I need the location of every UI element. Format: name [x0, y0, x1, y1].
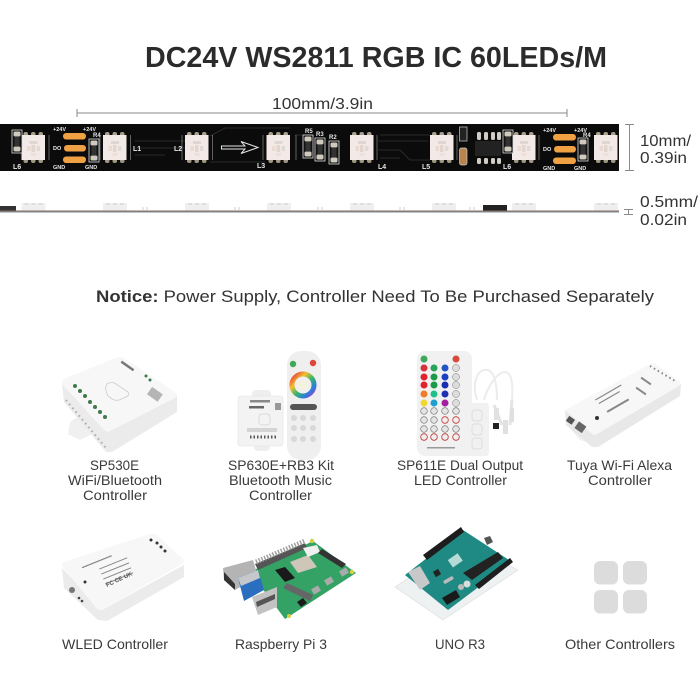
product: Raspberry Pi board [223, 539, 356, 619]
LED outlines [49, 135, 539, 160]
strip silkscreen labels: +24V [543, 128, 556, 134]
label: Tuya: Controller [588, 472, 652, 488]
strip silkscreen labels: +24V [83, 127, 96, 133]
label: Tuya: Tuya Wi-Fi Alexa [567, 457, 672, 473]
strip silkscreen labels: R2 [329, 135, 337, 141]
IC chip [475, 132, 501, 164]
product: UNO R3 board [395, 527, 518, 620]
LEDs [22, 132, 618, 163]
strip silkscreen labels: R5 [305, 129, 313, 135]
remote [287, 351, 321, 460]
strip silkscreen labels: GND [543, 166, 555, 172]
notice: Notice: Power Supply, Controller Need To Be Purchased Separately [96, 287, 655, 306]
label: SP530E: Controller [83, 487, 147, 503]
controller box [238, 390, 283, 451]
width dimension: 10mm: 0.39in [640, 150, 687, 167]
strip silkscreen labels: DO [53, 146, 62, 152]
strip silkscreen labels: L6 [13, 164, 21, 171]
strip silkscreen labels: +24V [53, 127, 66, 133]
label: SP611E [397, 457, 523, 488]
product: WLED controller: FC CE UK [105, 571, 134, 589]
icon: other controllers grid [594, 561, 647, 614]
strip silkscreen labels: L5 [422, 164, 430, 171]
strip silkscreen labels: GND [53, 165, 65, 171]
product: Tuya Wi-Fi controller [565, 363, 681, 447]
strip silkscreen labels: R3 [316, 132, 324, 138]
strip silkscreen labels: L3 [257, 163, 265, 170]
label: Raspberry Pi 3: Raspberry Pi 3 [235, 636, 327, 652]
strip silkscreen labels: R4 [93, 133, 101, 139]
label: SP530E: WiFi/Bluetooth [68, 472, 162, 488]
product: SP530E [62, 357, 177, 452]
thickness dimension: 0.5mm: 0.02in [640, 212, 687, 229]
title: DC24V WS2811 RGB IC 60LEDs/M [145, 42, 607, 74]
label: SP530E [68, 457, 162, 503]
strip silkscreen labels: L2 [174, 146, 182, 153]
label: SP530E: SP530E [90, 457, 139, 473]
label: SP630E+RB3 Kit: Bluetooth Music [229, 472, 332, 488]
label: Tuya [567, 457, 672, 488]
label: WLED: WLED Controller [62, 636, 168, 652]
label: SP611E: SP611E Dual Output [397, 457, 523, 473]
product: WLED controller [62, 534, 184, 621]
LED strip side view [0, 203, 619, 212]
resistors [12, 130, 588, 164]
strip silkscreen labels: GND [574, 166, 586, 172]
width dimension: 10mm [625, 124, 692, 170]
width dimension: 10mm: 10mm/ [640, 133, 692, 150]
thickness dimension: 0.5mm: 0.5mm/ [640, 194, 699, 211]
strip silkscreen labels: L1 [133, 146, 141, 153]
thickness dimension: 0.5mm [624, 194, 699, 229]
capacitor and resistor [460, 127, 467, 165]
direction arrow [222, 142, 258, 154]
label: Other Controllers: Other Controllers [565, 636, 675, 652]
strip silkscreen labels: GND [85, 165, 97, 171]
product: SP630E + RB3 remote [238, 351, 321, 460]
length dimension: 100mm [77, 96, 567, 117]
LED strip top view [0, 124, 619, 172]
strip silkscreen labels: R4 [583, 133, 591, 139]
label: UNO R3: UNO R3 [435, 636, 485, 652]
strip silkscreen labels [13, 127, 591, 172]
label: SP630E+RB3 Kit: Controller [249, 487, 312, 503]
label: SP630E+RB3 Kit [228, 457, 334, 503]
strip silkscreen labels: L6 [503, 164, 511, 171]
IR remote [417, 351, 472, 456]
dual output controller [465, 370, 514, 456]
strip silkscreen labels: L4 [378, 164, 386, 171]
solder pads right [553, 134, 576, 164]
label: SP630E+RB3 Kit: SP630E+RB3 Kit [228, 457, 334, 473]
length dimension: 100mm: 100mm/3.9in [272, 96, 373, 113]
strip silkscreen labels: +24V [574, 128, 587, 134]
solder pads left [63, 133, 86, 163]
label: SP611E: LED Controller [414, 472, 507, 488]
product: SP611E remote and controller [417, 351, 514, 456]
strip silkscreen labels: DO [543, 147, 552, 153]
